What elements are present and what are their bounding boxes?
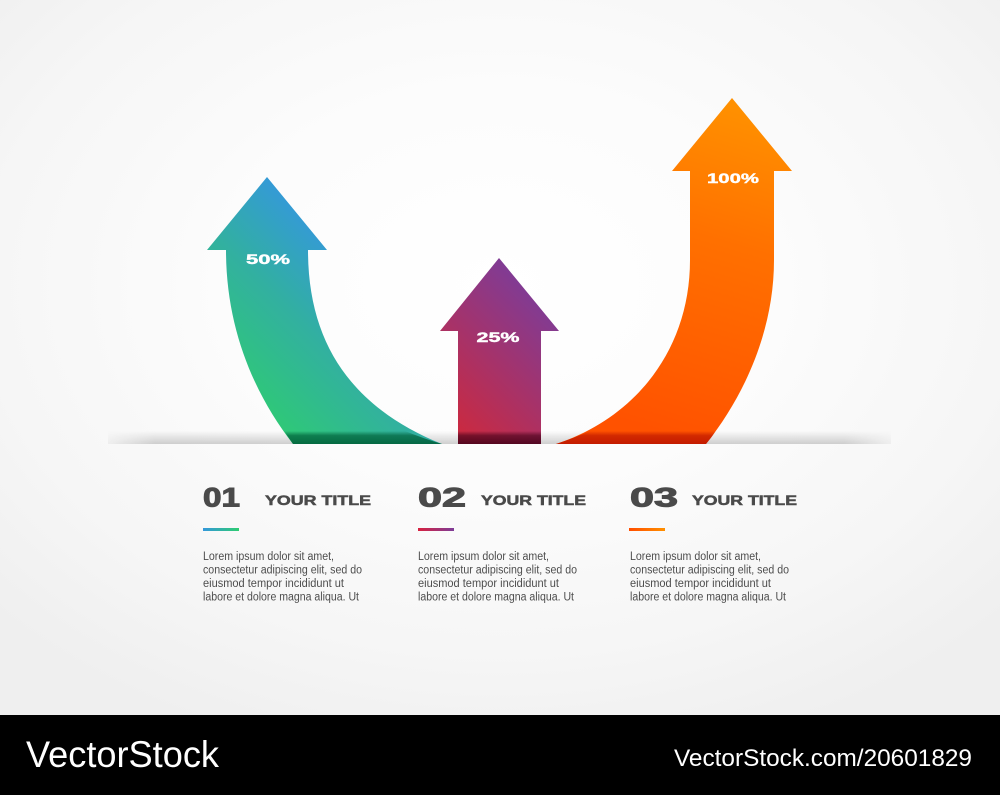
number 02: 02 xyxy=(418,482,466,512)
body text: labore et dolore magna aliqua. Ut xyxy=(630,592,787,604)
arrow: 50% teal-green curved arrow xyxy=(207,177,442,444)
accent line xyxy=(629,528,665,531)
panel: item 01 xyxy=(203,482,371,604)
arrow shadow: right xyxy=(556,431,716,444)
footer bar xyxy=(0,715,1000,795)
body text: Lorem ipsum dolor sit amet, xyxy=(630,551,761,563)
arrow shadow: left xyxy=(284,431,442,444)
number 03: 03 xyxy=(630,482,678,512)
body text: consectetur adipiscing elit, sed do xyxy=(630,564,789,576)
body text: eiusmod tempor incididunt ut xyxy=(630,578,772,590)
label: 25%: 25% xyxy=(476,329,520,345)
label: 100%: 100% xyxy=(707,170,760,186)
body text: Lorem ipsum dolor sit amet, xyxy=(203,551,334,563)
ground slot shadow xyxy=(108,434,891,444)
footer url text: VectorStock.com/20601829 xyxy=(674,745,972,772)
panel: item 02 xyxy=(418,482,586,604)
arrow shadow: middle xyxy=(458,431,541,444)
body text: eiusmod tempor incididunt ut xyxy=(418,578,560,590)
body text: eiusmod tempor incididunt ut xyxy=(203,578,345,590)
accent line xyxy=(203,528,239,531)
body text: Lorem ipsum dolor sit amet, xyxy=(418,551,549,563)
body text: labore et dolore magna aliqua. Ut xyxy=(203,592,360,604)
body text: consectetur adipiscing elit, sed do xyxy=(203,564,362,576)
heading: your title: YOUR TITLE xyxy=(481,493,586,508)
label: 50%: 50% xyxy=(246,251,291,267)
accent line xyxy=(418,528,454,531)
body text: labore et dolore magna aliqua. Ut xyxy=(418,592,575,604)
number 01: 01 xyxy=(203,482,240,512)
heading: your title: YOUR TITLE xyxy=(692,493,797,508)
heading: your title: YOUR TITLE xyxy=(265,493,371,508)
arrow: 100% orange curved arrow xyxy=(556,98,792,444)
footer logo text: VectorStock xyxy=(26,734,219,775)
body text: consectetur adipiscing elit, sed do xyxy=(418,564,577,576)
panel: item 03 xyxy=(629,482,797,604)
arrow: 25% crimson-purple straight arrow xyxy=(440,258,559,444)
